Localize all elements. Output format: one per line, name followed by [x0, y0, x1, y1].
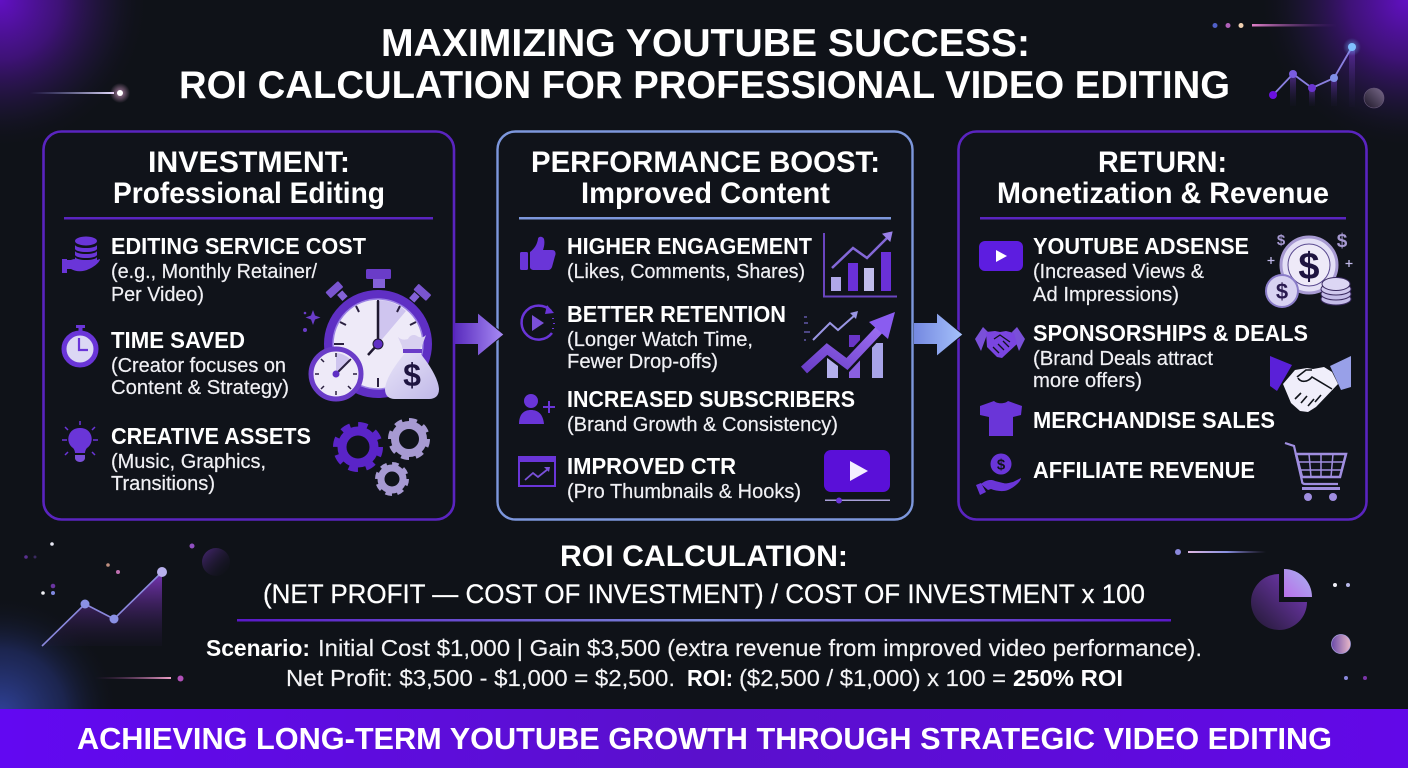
illustration: shopping cart [1285, 443, 1346, 501]
icon: browser trend [519, 457, 555, 486]
arrow: performance to return [914, 313, 963, 356]
text: creative assets: Transitions) [111, 473, 215, 495]
scenario line two: ROI: [687, 665, 733, 691]
panel: return [958, 132, 1366, 520]
text: increased subscribers: INCREASED SUBSCRIBERS [567, 386, 855, 412]
text: editing service cost [111, 233, 366, 306]
illustration: dollar coins: $ [1298, 246, 1320, 288]
text: sponsorships: SPONSORSHIPS & DEALS [1033, 320, 1308, 346]
text: merchandise sales: MERCHANDISE SALES [1033, 407, 1275, 433]
illustration: dollar coins: $ [1276, 279, 1288, 304]
text: editing service cost: Per Video) [111, 284, 204, 306]
title [179, 22, 1230, 107]
panel: performance boost [498, 132, 912, 520]
chart: rising arrows [804, 311, 895, 378]
text: better retention: BETTER RETENTION [567, 301, 786, 327]
heading: investment: INVESTMENT: [148, 146, 350, 179]
text: editing service cost: EDITING SERVICE COST [111, 233, 366, 259]
icon: coin in hand: $ [997, 456, 1006, 474]
icon: coins in hand [62, 236, 100, 273]
footer banner: ACHIEVING LONG-TERM YOUTUBE GROWTH THROUGH STRATEGIC VIDEO EDITING [77, 721, 1332, 756]
text: sponsorships: more offers) [1033, 370, 1142, 392]
icon: light bulb [62, 421, 98, 462]
illustration: dollar coins [1266, 231, 1352, 307]
heading: investment: Professional Editing [113, 177, 385, 210]
text: higher engagement: HIGHER ENGAGEMENT [567, 233, 812, 259]
scenario line two: Net Profit: $3,500 - $1,000 = $2,500. [286, 665, 675, 691]
icon: gears [336, 420, 428, 494]
scenario line two [286, 665, 1123, 691]
title: ROI CALCULATION FOR PROFESSIONAL VIDEO EDITING [179, 64, 1230, 107]
icon: t-shirt [980, 401, 1022, 436]
icon: retention play [522, 305, 554, 340]
icon: youtube play [979, 241, 1023, 271]
heading: investment [64, 146, 433, 220]
text: better retention: Fewer Drop-offs) [567, 351, 718, 373]
text: improved ctr: (Pro Thumbnails & Hooks) [567, 481, 801, 503]
text: higher engagement: (Likes, Comments, Shares) [567, 261, 805, 283]
icon: subscriber plus [519, 394, 555, 424]
formula: (NET PROFIT — COST OF INVESTMENT) / COST OF INVESTMENT x 100 [263, 579, 1145, 609]
icon: thumbs up [520, 237, 556, 270]
text: time saved [111, 327, 289, 399]
heading: return: RETURN: [1098, 146, 1227, 179]
panel: investment [44, 132, 454, 520]
text: creative assets: (Music, Graphics, [111, 451, 266, 473]
text: better retention [567, 301, 786, 373]
text: creative assets: CREATIVE ASSETS [111, 423, 311, 449]
decoration: top-right dots and line chart [1212, 23, 1384, 108]
text: youtube adsense [1033, 233, 1249, 306]
heading: performance boost: PERFORMANCE BOOST: [531, 146, 880, 179]
text: increased subscribers [567, 386, 855, 436]
heading: return: Monetization & Revenue [997, 177, 1329, 210]
illustration: dollar coins: $ [1277, 232, 1286, 249]
illustration: large stopwatch with money bag [311, 269, 439, 399]
text: youtube adsense: Ad Impressions) [1033, 284, 1179, 306]
heading: performance boost: Improved Content [581, 177, 830, 210]
icon: coin in hand [976, 454, 1021, 495]
text: editing service cost: (e.g., Monthly Retainer/ [111, 261, 317, 283]
text: creative assets [111, 423, 311, 495]
text: affiliate revenue: AFFILIATE REVENUE [1033, 457, 1255, 483]
heading: performance boost [519, 146, 891, 220]
illustration: large stopwatch with money bag: $ [403, 357, 421, 393]
text: improved ctr [567, 453, 801, 503]
text: time saved: (Creator focuses on [111, 355, 286, 377]
decoration: top-left streak [30, 83, 130, 103]
text: improved ctr: IMPROVED CTR [567, 453, 736, 479]
text: youtube adsense: YOUTUBE ADSENSE [1033, 233, 1249, 259]
heading: roi calculation: ROI CALCULATION: [560, 540, 848, 573]
text: time saved: Content & Strategy) [111, 377, 289, 399]
text: better retention: (Longer Watch Time, [567, 329, 753, 351]
scenario line two: ($2,500 / $1,000) x 100 = [739, 665, 1006, 691]
icon: small stopwatch [64, 325, 96, 365]
text: youtube adsense: (Increased Views & [1033, 261, 1205, 283]
heading: return [980, 146, 1346, 220]
text: sponsorships: (Brand Deals attract [1033, 348, 1213, 370]
illustration: dollar coins: $ [1337, 231, 1348, 252]
footer banner [0, 709, 1408, 768]
text: increased subscribers: (Brand Growth & Consistency) [567, 414, 838, 436]
illustration: video player [824, 450, 890, 504]
text: higher engagement [567, 233, 812, 283]
decoration: bottom-right pie chart and dots [1175, 549, 1367, 680]
arrow: investment to performance [455, 313, 504, 356]
text: sponsorships [1033, 320, 1308, 392]
icon: small handshake [975, 327, 1025, 358]
roi calculation block [206, 540, 1202, 691]
scenario line one: Scenario: [206, 635, 310, 661]
scenario line one: Initial Cost $1,000 | Gain $3,500 (extra revenue from improved video performance). [318, 635, 1202, 661]
chart: engagement bars and trend [824, 232, 897, 296]
title: MAXIMIZING YOUTUBE SUCCESS: [381, 22, 1030, 65]
scenario line two: 250% ROI [1013, 665, 1123, 691]
decoration: bottom-left chart and dots [24, 542, 230, 682]
icon: sparkles [303, 310, 320, 332]
illustration: large handshake [1270, 356, 1351, 412]
text: time saved: TIME SAVED [111, 327, 245, 353]
